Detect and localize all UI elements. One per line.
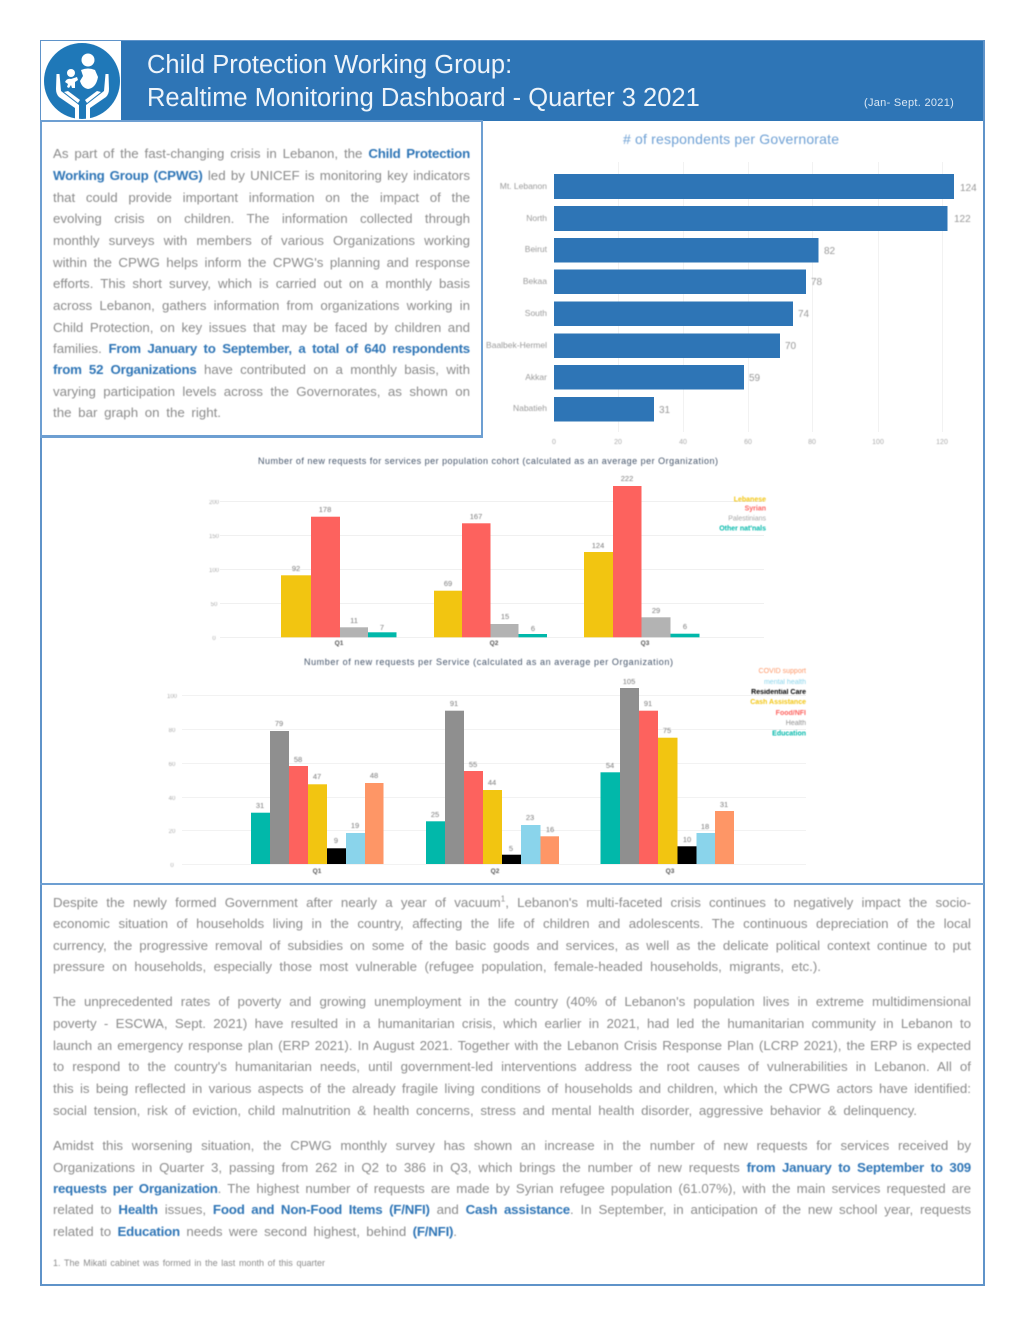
quarter labels: Q2: [490, 640, 499, 647]
value labels: 122: [954, 214, 971, 225]
legend: [750, 668, 806, 738]
value labels: 124: [960, 183, 977, 194]
legend: mental health: [764, 679, 806, 686]
intro text: families. From January to September, a total of 640 respondents: [53, 341, 470, 356]
header banner: [41, 41, 983, 121]
value labels: 48: [370, 771, 378, 780]
intro text: efforts. This short survey, which is carried out on a monthly basis: [53, 276, 470, 291]
intro text: monthly surveys with members of various Organizations working: [53, 233, 470, 248]
title: Realtime Monitoring Dashboard - Quarter 3 2021: [147, 84, 700, 112]
intro text: [52, 146, 470, 420]
value labels: 79: [275, 719, 283, 728]
value labels: 124: [592, 541, 604, 550]
intro text: evolving crisis on children. The information collected through: [53, 211, 470, 226]
intro text: the bar graph on the right.: [53, 405, 221, 420]
governorate labels: North: [526, 213, 547, 223]
value labels: 78: [811, 277, 823, 288]
legend: Cash Assistance: [750, 699, 806, 706]
x axis: 20: [614, 439, 622, 446]
bars Q1: [251, 731, 384, 864]
legend: Other nat'nals: [719, 526, 766, 532]
narrative paragraph 1: pressure on households, especially those most vulnerable (refugee population, female-headed households, migrants, etc.).: [53, 959, 821, 974]
value labels: 75: [663, 726, 671, 735]
intro text: from 52 Organizations have contributed on a monthly basis, with: [53, 362, 470, 377]
bars Q3: [584, 486, 700, 637]
y axis: 60: [169, 762, 176, 768]
icon: hands protecting parent and child: [44, 43, 120, 119]
narrative paragraph 3: related to Education needs were second highest, behind (F/NFI).: [53, 1224, 457, 1239]
narrative paragraph 2: launch an emergency response plan (ERP 2021). In August 2021. Together with the Lebanon Crisis Response Plan (LCRP 2021), the ERP is expected: [53, 1038, 971, 1053]
governorate labels: Mt. Lebanon: [500, 181, 547, 191]
value labels: 54: [606, 761, 614, 770]
title: Child Protection Working Group:: [147, 51, 512, 79]
intro text: Working Group (CPWG) led by UNICEF is monitoring key indicators: [53, 168, 470, 183]
quarter labels: [313, 868, 675, 875]
narrative paragraph 3: Organizations in Quarter 3, passing from 262 in Q2 to 386 in Q3, which brings the number of new requests from January to September to 309: [53, 1160, 971, 1175]
narrative paragraph 1: [53, 895, 972, 974]
y axis: 50: [211, 602, 218, 608]
value labels: 23: [526, 813, 534, 822]
y axis: 80: [169, 728, 176, 734]
value labels: 31: [256, 801, 264, 810]
title: [147, 51, 700, 112]
value labels: 44: [488, 778, 496, 787]
value labels: 18: [701, 822, 709, 831]
governorate labels: Beirut: [525, 244, 548, 254]
governorate labels: Nabatieh: [513, 403, 547, 413]
narrative paragraph 2: [52, 994, 972, 1118]
x axis: 40: [679, 439, 687, 446]
legend: Food/NFI: [776, 710, 806, 717]
value labels: 178: [319, 505, 331, 514]
value labels: 55: [469, 760, 477, 769]
value labels: 58: [294, 755, 302, 764]
narrative paragraph 1: Despite the newly formed Government after nearly a year of vacuum1, Lebanon's multi-faceted crisis continues to negatively impact the socio-: [53, 895, 971, 910]
narrative paragraph 2: social tension, risk of eviction, child malnutrition & health concerns, stress and mental health disorder, aggressive behavior & delinquency.: [53, 1103, 917, 1118]
chart title: Number of new requests for services per population cohort (calculated as an average per Organization): [258, 456, 718, 466]
value labels: 15: [501, 612, 509, 621]
footnote: 1. The Mikati cabinet was formed in the last month of this quarter: [53, 1258, 325, 1268]
panel: introduction: [40, 120, 483, 438]
chart title: Number of new requests per Service (calculated as an average per Organization): [304, 657, 673, 667]
x axis: 120: [936, 439, 948, 446]
x axis: 80: [808, 439, 816, 446]
chart: respondents per governorate: [486, 131, 977, 446]
value labels: 91: [644, 699, 652, 708]
narrative paragraph 1: currency, the progressive removal of subsidies on some of the basic goods and services, as well as the delicate political context continue to put: [53, 938, 971, 953]
value labels: 69: [444, 579, 452, 588]
value labels: 31: [720, 800, 728, 809]
legend: Syrian: [745, 506, 766, 512]
value labels: 105: [623, 677, 635, 686]
quarter labels: [335, 640, 650, 647]
governorate labels: South: [525, 308, 547, 318]
legend: Lebanese: [734, 496, 766, 504]
narrative paragraph 3: Amidst this worsening situation, the CPWG monthly survey has shown an increase in the number of new requests for services received by: [53, 1138, 971, 1153]
chart: new requests per population cohort: [209, 456, 766, 648]
quarter labels: Q3: [666, 868, 675, 875]
intro text: As part of the fast-changing crisis in Lebanon, the Child Protection: [53, 146, 470, 161]
value labels: 10: [683, 835, 691, 844]
y axis: 0: [170, 863, 174, 869]
governorate labels: Akkar: [525, 372, 547, 382]
value labels: 82: [824, 246, 836, 257]
narrative paragraph 3: [52, 1138, 972, 1240]
intro text: within the CPWG helps inform the CPWG's planning and response: [53, 255, 470, 270]
intro text: across Lebanon, gathers information from organizations working in: [53, 298, 470, 313]
value labels: 31: [659, 405, 671, 416]
bars Q1: [281, 517, 396, 637]
value labels: 59: [749, 373, 761, 384]
x axis: 0: [552, 439, 556, 446]
y axis: 100: [167, 694, 178, 700]
value labels: 70: [785, 341, 797, 352]
intro text: varying participation levels across the Governorates, as shown on: [53, 384, 470, 399]
narrative paragraph 1: economic situation of households living in the country, affecting the life of children and adolescents. The continuous depreciation of the local: [53, 916, 971, 931]
bars: [554, 174, 954, 422]
value labels: 74: [798, 309, 810, 320]
value labels: 7: [380, 623, 384, 632]
value labels: 5: [509, 844, 513, 853]
governorate labels: [486, 181, 548, 413]
value labels: 47: [313, 772, 321, 781]
intro text: Child Protection, on key issues that may be faced by children and: [53, 320, 470, 335]
x axis: 60: [744, 439, 752, 446]
bars Q3: [600, 688, 734, 864]
logo tile: [41, 41, 121, 121]
panel divider: narrative section: [40, 883, 984, 885]
narrative paragraph 3: related to Health issues, Food and Non-Food Items (F/NFI) and Cash assistance. In September, in anticipation of the new school year, requests: [53, 1202, 971, 1217]
value labels: [256, 677, 728, 853]
governorate labels: Baalbek-Hermel: [486, 340, 547, 350]
value labels: 9: [334, 836, 338, 845]
y axis: [209, 500, 220, 642]
quarter labels: Q2: [491, 868, 500, 875]
governorate labels: Bekaa: [523, 276, 547, 286]
y axis: 20: [169, 829, 176, 835]
value labels: 29: [652, 606, 660, 615]
legend: COVID support: [759, 668, 806, 675]
value labels: 19: [351, 821, 359, 830]
legend: [719, 496, 766, 532]
narrative paragraph 2: poverty - ESCWA, Sept. 2021) have resulted in a humanitarian crisis, which earlier in 2021, had led the humanitarian community in Lebanon to: [53, 1016, 971, 1031]
value labels: [659, 183, 977, 416]
y axis: 100: [209, 568, 220, 574]
value labels: 92: [292, 564, 300, 573]
value labels: [292, 474, 687, 633]
y axis: 0: [212, 636, 216, 642]
narrative paragraph 2: The unprecedented rates of poverty and growing unemployment in the country (40% of Lebanon's population lives in extreme multidimensional: [53, 994, 971, 1009]
legend: Residential Care: [751, 689, 806, 696]
y axis: [167, 694, 178, 869]
value labels: 6: [683, 622, 687, 631]
value labels: 222: [621, 474, 633, 483]
bars Q2: [426, 711, 559, 864]
value labels: 25: [431, 810, 439, 819]
narrative paragraph 2: to respond to the country's humanitarian needs, until government-led interventions address the root causes of vulnerabilities in Lebanon. All of: [53, 1059, 971, 1074]
chart title: # of respondents per Governorate: [623, 131, 839, 147]
intro text: that could provide important information on the impact of the: [53, 190, 470, 205]
legend: Palestinians: [728, 516, 766, 522]
quarter labels: Q1: [313, 868, 322, 875]
x axis: [552, 439, 948, 446]
chart: new requests per service: [167, 657, 806, 876]
y axis: 150: [209, 534, 220, 540]
bars Q2: [434, 523, 547, 637]
value labels: 91: [450, 699, 458, 708]
narrative paragraph 3: requests per Organization. The highest number of requests are made by Syrian refugee population (61.07%), with the main services requested are: [53, 1181, 971, 1196]
y axis: 200: [209, 500, 220, 506]
narrative paragraph 2: this is being reflected in various aspects of the already fragile living conditions of households and children, which the CPWG actors have identified:: [53, 1081, 971, 1096]
value labels: 6: [531, 624, 535, 633]
date range: (Jan- Sept. 2021): [864, 97, 954, 109]
value labels: 11: [350, 616, 358, 625]
quarter labels: Q3: [641, 640, 650, 647]
value labels: 167: [470, 512, 482, 521]
x axis: 100: [872, 439, 884, 446]
legend: Health: [786, 720, 806, 727]
value labels: 16: [546, 825, 554, 834]
y axis: 40: [169, 796, 176, 802]
legend: Education: [772, 730, 806, 738]
quarter labels: Q1: [335, 640, 344, 647]
